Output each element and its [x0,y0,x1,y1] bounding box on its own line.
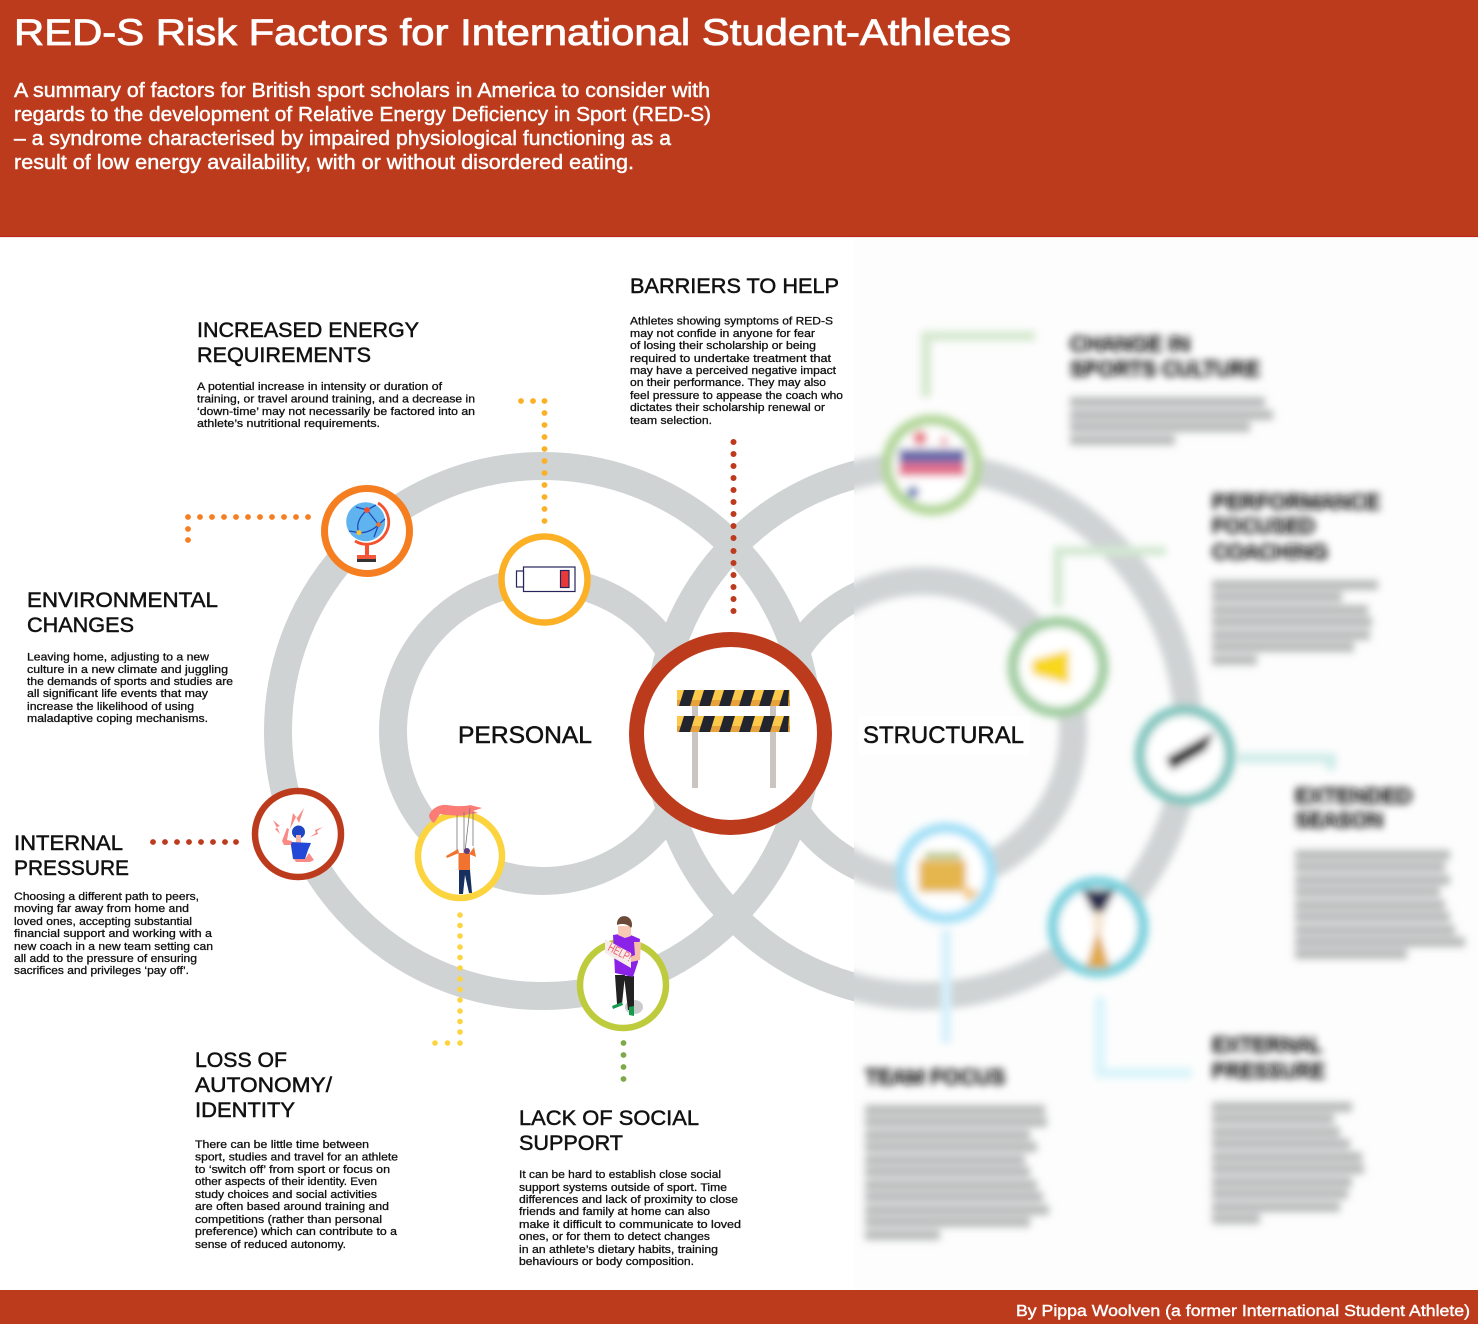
body text: culture in a new climate and juggling [27,664,228,676]
dotted connector: environmental changes [185,514,311,543]
body text: There can be little time between [195,1139,369,1151]
panel: barriers to help [630,274,843,427]
panel: increased energy requirements [197,318,475,430]
heading: REQUIREMENTS [197,343,371,367]
body text: required to undertake treatment that [630,353,832,365]
heading: external pressure [1212,1033,1325,1083]
body text: competitions (rather than personal [195,1214,382,1226]
illegible body: extended season [1295,850,1465,959]
body text: feel pressure to appease the coach who [630,390,843,402]
dotted connector: internal pressure [150,839,239,845]
icon: person with help sign [580,916,666,1028]
icon: megaphone [1013,622,1103,712]
body text: of losing their scholarship or being [630,340,816,352]
body text: Leaving home, adjusting to a new [27,652,210,664]
heading: extended season: SEASON [1295,808,1383,832]
connector: external pressure [1100,997,1192,1073]
body text: increase the likelihood of using [27,701,194,713]
connector: coaching [1058,551,1166,607]
heading: CHANGES [27,613,134,637]
subtitle: A summary of factors for British sport scholars in America to consider with [14,80,710,102]
body text: all add to the pressure of ensuring [14,953,197,965]
heading: INCREASED ENERGY [197,318,419,342]
heading [197,318,419,367]
body text: loved ones, accepting substantial [14,916,192,928]
body text: training, or travel around training, and a decrease in [197,394,475,406]
body text [630,316,843,427]
label: structural [858,716,1030,755]
body text [14,891,213,977]
body text: sense of reduced autonomy. [195,1239,346,1251]
body text [519,1169,741,1268]
body text: to ‘switch off’ from sport or focus on [195,1164,390,1176]
icon: puppet [418,805,502,898]
venn rings: sharp left portion [264,452,854,1010]
heading: change in sports culture [1070,332,1260,381]
heading: change in sports culture: CHANGE IN [1070,332,1190,356]
body text: Athletes showing symptoms of RED-S [630,316,833,328]
heading: performance focused coaching: COACHING [1212,540,1328,564]
body text: moving far away from home and [14,903,189,915]
body text: ones, or for them to detect changes [519,1231,710,1243]
body text: athlete’s nutritional requirements. [197,418,380,430]
footer credit: By Pippa Woolven (a former International Student Athlete) [1016,1303,1470,1320]
body text: friends and family at home can also [519,1206,710,1218]
body text: preference) which can contribute to a [195,1226,398,1238]
heading [14,831,129,880]
illegible body: performance focused coaching [1212,580,1378,665]
body text: behaviours or body composition. [519,1256,694,1268]
dotted connector: barriers to help [730,439,736,614]
body text: It can be hard to establish close social [519,1169,721,1181]
body text: support systems outside of sport. Time [519,1182,727,1194]
header banner [0,0,1478,238]
connector: extended season [1238,758,1331,770]
subtitle [14,80,711,174]
body text: team selection. [630,415,712,427]
title: RED-S Risk Factors for International Student-Athletes [14,12,1011,53]
body text: may have a perceived negative impact [630,365,837,377]
subtitle: regards to the development of Relative Energy Deficiency in Sport (RED-S) [14,104,711,126]
body text: sacrifices and privileges ‘pay off’. [14,965,189,977]
body text: A potential increase in intensity or duration of [197,381,443,393]
heading: INTERNAL [14,831,123,855]
body text [195,1139,398,1251]
heading: SUPPORT [519,1131,623,1155]
label: structural: STRUCTURAL [863,722,1024,749]
icon: whistle [1140,710,1230,800]
blurred rings [854,452,1204,1014]
body text: maladaptive coping mechanisms. [27,713,208,725]
body text: Choosing a different path to peers, [14,891,199,903]
heading: PRESSURE [14,856,129,880]
heading: IDENTITY [195,1098,295,1122]
icon: team [901,828,991,918]
body text: the demands of sports and studies are [27,676,233,688]
panel: environmental changes [27,588,233,725]
dotted connector: social support [621,1040,626,1082]
icon: globe [324,488,410,574]
body text: differences and lack of proximity to close [519,1194,738,1206]
body text: study choices and social activities [195,1189,377,1201]
illegible body: team focus [865,1105,1049,1240]
subtitle: – a syndrome characterised by impaired physiological functioning as a [14,128,672,150]
body text: financial support and working with a [14,928,213,940]
body text: make it difficult to communicate to loved [519,1219,741,1231]
heading: performance focused coaching: PERFORMANCE [1212,490,1380,514]
heading [27,588,218,637]
heading: LOSS OF [195,1048,287,1072]
body text [197,381,475,430]
body text: other aspects of their identity. Even [195,1176,377,1188]
body text: are often based around training and [195,1201,389,1213]
heading: ENVIRONMENTAL [27,588,218,612]
dotted connector: increased energy [518,398,547,524]
heading: extended season: EXTENDED [1295,784,1412,808]
body text: may not confide in anyone for fear [630,328,815,340]
connector: team focus [941,930,951,1043]
body text: new coach in a new team setting can [14,941,213,953]
panel: internal pressure [14,831,213,977]
heading: AUTONOMY/ [195,1073,332,1097]
heading: change in sports culture: SPORTS CULTURE [1070,357,1260,381]
heading: BARRIERS TO HELP [630,274,839,298]
icon: low battery [502,536,588,622]
illegible body: change in sports culture [1070,397,1273,445]
icon: stressed woman [255,791,341,877]
heading [519,1106,699,1155]
heading: performance focused coaching [1212,490,1380,564]
body text: sport, studies and travel for an athlete [195,1152,398,1164]
heading: extended season [1295,784,1412,832]
dotted connector: loss of autonomy [432,912,463,1046]
connector: sports culture [926,336,1035,397]
heading: external pressure: EXTERNAL [1212,1033,1322,1057]
panel: loss of autonomy / identity [195,1048,398,1251]
icon: hourglass [1053,882,1143,972]
heading: LACK OF SOCIAL [519,1106,699,1130]
icon: barrier [636,640,824,828]
body text: ‘down-time’ may not necessarily be factored into an [197,406,475,418]
icon: flag [887,420,977,510]
blurred structural panel [854,327,1470,1245]
body text: on their performance. They may also [630,377,826,389]
panel: lack of social support [519,1106,741,1268]
illegible body: external pressure [1212,1102,1364,1224]
subtitle: result of low energy availability, with or without disordered eating. [14,152,634,174]
icon: person with help sign: HELP! [606,940,634,964]
body text [27,652,233,725]
label: personal: PERSONAL [458,722,592,749]
heading: team focus: TEAM FOCUS [865,1065,1005,1089]
footer bar [0,1290,1478,1324]
body text: dictates their scholarship renewal or [630,402,825,414]
heading [195,1048,332,1122]
body text: in an athlete’s dietary habits, training [519,1244,718,1256]
heading: performance focused coaching: FOCUSED [1212,514,1315,538]
body text: all significant life events that may [27,688,208,700]
heading: external pressure: PRESSURE [1212,1059,1325,1083]
